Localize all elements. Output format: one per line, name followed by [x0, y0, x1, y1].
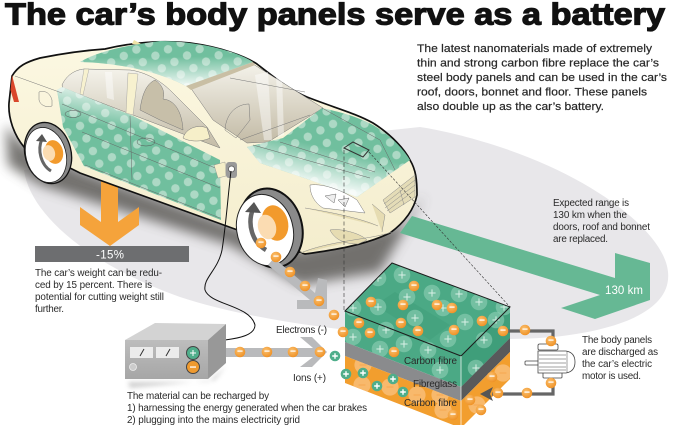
- car shadow: [6, 125, 425, 285]
- cube outline: [345, 263, 510, 356]
- charging port: [214, 162, 237, 178]
- car body: [9, 42, 417, 254]
- grey arrow: charger to cube: [226, 337, 327, 367]
- tail light: [10, 75, 19, 102]
- discharge text: The body panels: [582, 335, 652, 346]
- discharge text: [582, 335, 658, 382]
- range text: [553, 198, 650, 245]
- range text: Expected range is: [553, 198, 629, 209]
- battery cube: Fibreglass: [413, 379, 457, 390]
- projection lines: [344, 142, 510, 311]
- intro text: [417, 43, 667, 113]
- electrons label: Electrons (-): [276, 325, 327, 336]
- green carbon fibre layer: [345, 263, 510, 387]
- recharge text: The material can be recharged by: [127, 391, 269, 402]
- weight text: The car’s weight can be redu-: [35, 268, 162, 279]
- electric motor: [525, 344, 575, 378]
- ions label: Ions (+): [293, 373, 326, 384]
- ground ellipse: [24, 127, 668, 339]
- fibreglass layer: [345, 342, 461, 401]
- front wheel: [229, 181, 311, 275]
- percentage bar: -15%: [96, 250, 124, 262]
- intro text: roof, doors, bonnet and floor. These panels: [417, 86, 647, 98]
- negative charges: [353, 356, 512, 419]
- rear wheel: [18, 117, 78, 189]
- door panels: [57, 87, 221, 220]
- range label: 130 km: [605, 285, 643, 297]
- motor circuit: [480, 331, 553, 401]
- discharge text: motor is used.: [582, 371, 641, 382]
- weight text: potential for cutting weight still: [35, 292, 164, 303]
- side windows: [62, 69, 220, 148]
- headlight: [310, 185, 365, 213]
- orange carbon fibre layer: [345, 352, 510, 425]
- intro text: steel body panels and can be used in the car’s: [417, 72, 667, 84]
- battery cube: Carbon fibre: [404, 398, 458, 409]
- recharge text: 1) harnessing the energy generated when the car brakes: [127, 403, 367, 414]
- intro text: The latest nanomaterials made of extremely: [417, 43, 652, 55]
- layer labels: Carbon fibre: [404, 356, 458, 367]
- door mirror: [183, 126, 210, 141]
- range text: 130 km when the: [553, 210, 628, 221]
- bumper details: [298, 204, 392, 254]
- weight text: ced by 15 percent. There is: [35, 280, 152, 291]
- recharge text: [127, 391, 367, 425]
- rear door detail lines: [15, 76, 62, 107]
- discharge text: are discharged as: [582, 347, 658, 358]
- orange weight arrow: [80, 180, 139, 246]
- cable: [205, 171, 255, 340]
- ions: [330, 351, 408, 397]
- grey arrow: wheel to cube: [268, 258, 327, 309]
- battery cube: [345, 263, 512, 425]
- charger unit: [125, 323, 226, 388]
- range text: are replaced.: [553, 234, 608, 245]
- weight text: further.: [35, 304, 64, 315]
- positive charges: [345, 267, 512, 378]
- weight text: [35, 268, 164, 315]
- bonnet panel: [247, 108, 410, 197]
- percentage bar: [35, 246, 189, 262]
- discharge text: the car’s electric: [582, 359, 652, 370]
- roof panel: [80, 41, 253, 86]
- roof fin: [132, 40, 143, 45]
- range text: doors, roof and bonnet: [553, 222, 650, 233]
- green range arrow: [400, 216, 650, 319]
- car: [9, 40, 417, 275]
- intro text: thin and strong carbon fibre replace the car’s: [417, 58, 659, 70]
- electrons: [235, 238, 556, 420]
- intro text: also double up as the car’s battery.: [417, 101, 604, 113]
- grille: [383, 175, 415, 213]
- windscreen: [186, 62, 323, 143]
